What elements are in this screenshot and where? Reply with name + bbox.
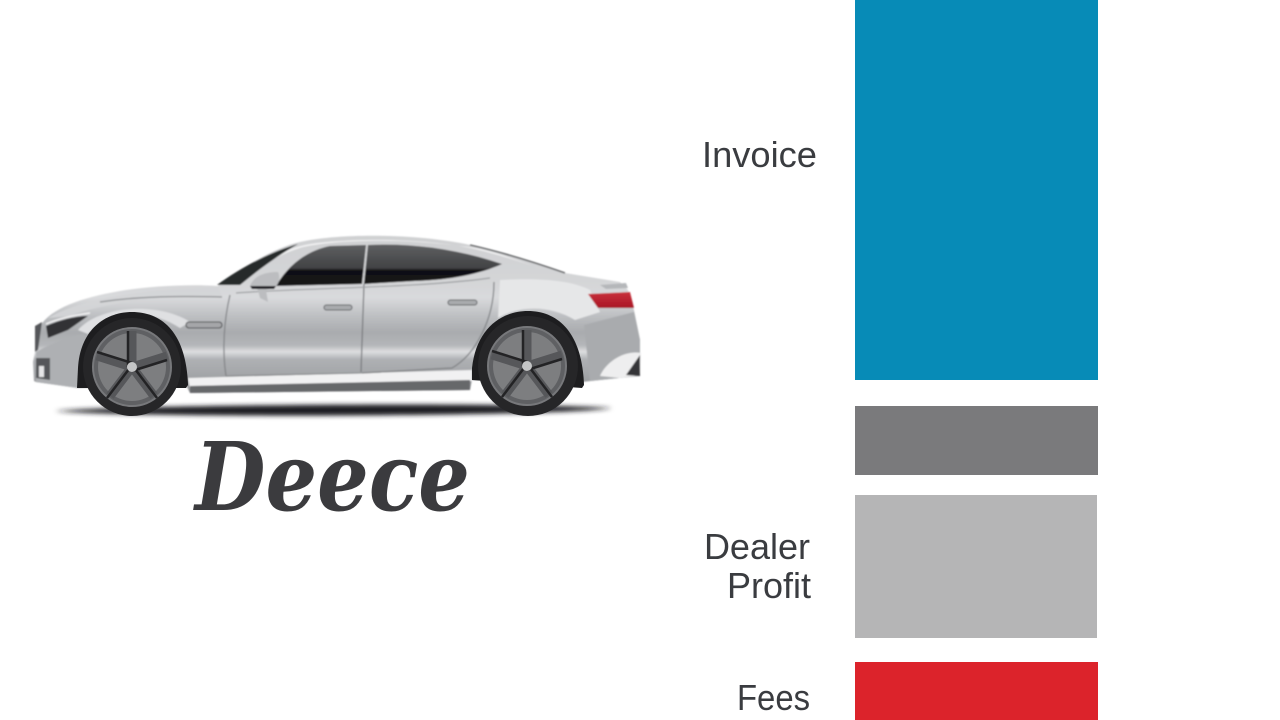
rear spoiler lip <box>600 283 628 289</box>
headlight <box>46 316 88 338</box>
door seams <box>224 295 230 376</box>
rear wheel <box>478 316 578 416</box>
car illustration <box>33 236 641 416</box>
front bumper shade <box>36 334 84 388</box>
label: Dealer Profit: Dealer <box>704 526 810 567</box>
sill <box>188 370 472 388</box>
ground shadow <box>55 404 612 416</box>
segment: dealer profit <box>855 495 1097 638</box>
front fender highlight <box>78 309 190 334</box>
rear deck line <box>470 245 565 273</box>
windshield <box>217 244 298 285</box>
rear wheel arch <box>472 311 584 388</box>
front wheel arch <box>77 312 188 388</box>
side windows <box>276 245 366 286</box>
segment: fees <box>855 662 1098 720</box>
door handles <box>324 305 352 310</box>
hood highlight <box>48 287 222 318</box>
label: Dealer Profit: Profit <box>727 565 811 606</box>
fog lamp <box>36 358 50 380</box>
rear bumper shade <box>584 312 640 381</box>
label: Invoice: Invoice <box>702 134 817 175</box>
front wheel <box>83 318 181 416</box>
label: Fees: Fees <box>737 677 810 718</box>
front grille <box>35 322 42 352</box>
car body <box>33 236 641 393</box>
stacked bar chart <box>855 0 1098 720</box>
side vent <box>186 322 222 328</box>
brand wordmark: Deece <box>192 422 470 533</box>
rear diffuser <box>600 353 641 378</box>
segment: invoice <box>855 0 1098 380</box>
tail light <box>588 292 634 308</box>
mirror <box>250 272 279 302</box>
roof highlight <box>228 240 545 285</box>
segment: gray <box>855 406 1098 475</box>
rear quarter highlight <box>498 279 600 320</box>
